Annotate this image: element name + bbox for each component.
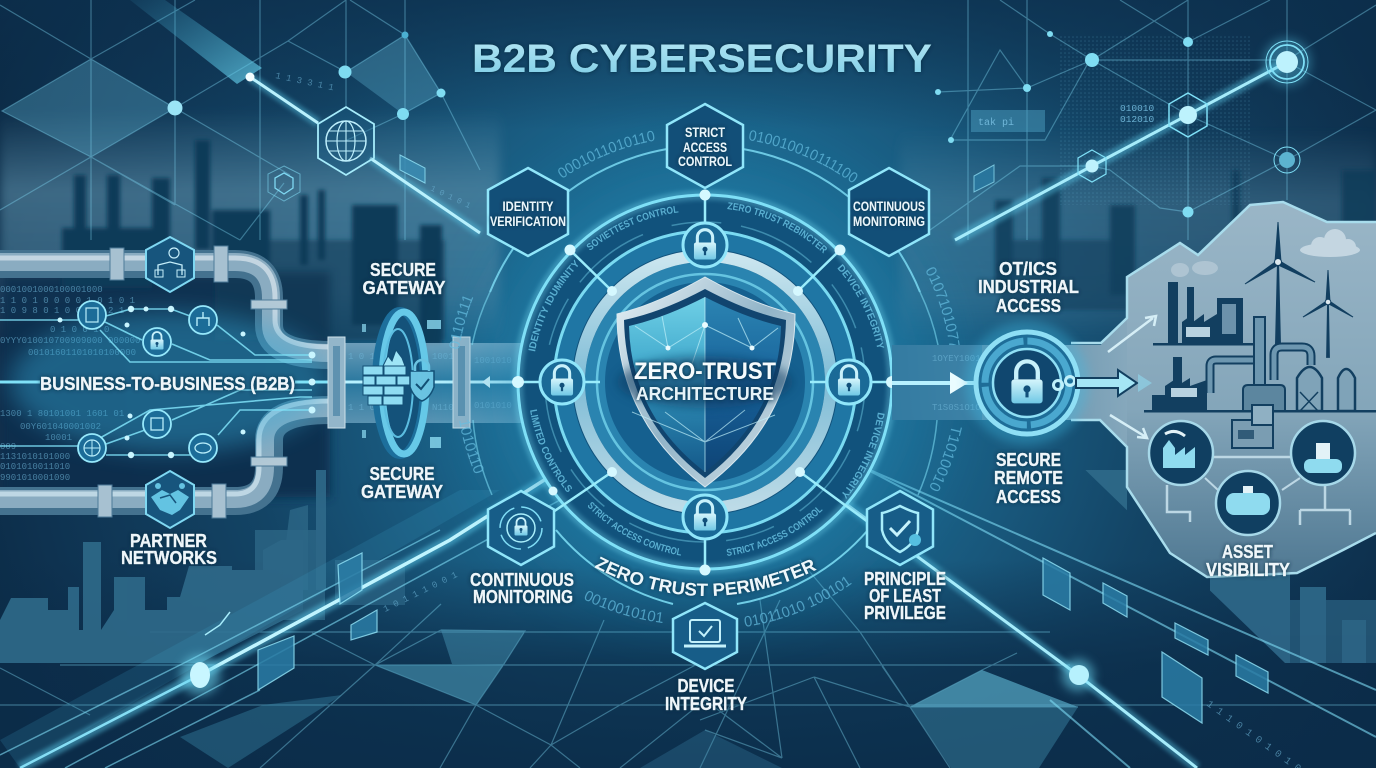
heading: device integrity	[665, 676, 747, 714]
icon: tall stack	[1243, 317, 1285, 411]
panel outline	[1071, 202, 1376, 577]
heading: ot ics industrial access: OT/ICS	[999, 259, 1057, 279]
gateway ring	[376, 311, 426, 455]
shield facets	[632, 297, 778, 472]
beam: upper right with nodes	[935, 31, 1311, 240]
hexagon icon: least privilege shield	[867, 491, 933, 565]
nodes	[512, 190, 898, 576]
background: upper left facets	[2, 35, 441, 157]
icon: globe hexagon	[318, 107, 374, 175]
title: B2B CYBERSECURITY	[472, 37, 932, 81]
hexagon: identity verification	[488, 168, 568, 256]
heading: continuous monitoring lower	[470, 570, 574, 607]
icon: small hexagon	[268, 166, 300, 201]
heading: continuous monitoring lower: MONITORING	[473, 587, 573, 607]
icon: circuit lock node	[143, 328, 171, 356]
beam: upper right with nodes: 012010	[1120, 114, 1155, 125]
ring text	[528, 202, 885, 556]
panel: binary streams left: 1131010101000	[0, 452, 70, 462]
icon: lock right	[827, 360, 871, 404]
heading: partner networks: PARTNER	[130, 531, 207, 551]
binary arcs: 0010010101	[584, 591, 662, 623]
heading: device integrity: INTEGRITY	[665, 694, 747, 714]
pipe: lower	[0, 401, 330, 518]
icon: circuit flow node	[189, 306, 217, 334]
panel: industrial site	[892, 202, 1376, 577]
beam: upper left with globe	[130, 0, 480, 233]
heading: device integrity: DEVICE	[678, 676, 734, 696]
icon: small wind turbine	[1303, 270, 1353, 357]
panel: binary streams left: 0101010011010	[0, 462, 70, 472]
background: lower right skyline	[1085, 470, 1376, 667]
panel: binary streams left: 10001	[45, 433, 72, 443]
icon: handshake hexagon on lower pipe	[146, 471, 194, 528]
ring text: DEVICE INTEGRITY	[842, 412, 885, 499]
binary arcs: T1010010	[930, 428, 962, 492]
arrow: faint	[1138, 374, 1152, 392]
arrow: to industrial site	[1076, 370, 1137, 396]
heading: secure gateway top	[362, 260, 446, 298]
beam: upper left with globe: 1 1 3 3 1 1	[274, 71, 335, 93]
panel: binary streams left: 0001001000100001000	[0, 285, 103, 295]
binary arcs: 01011010 1001010	[744, 576, 852, 626]
ring text: DEVICE INTEGRITY	[838, 264, 884, 348]
data stream through gateway: 0101010	[474, 401, 512, 411]
icon: tank circle	[1216, 471, 1280, 535]
stream band: 1OYEY1001Y	[932, 354, 987, 364]
beam: upper right with nodes: tak pi	[978, 117, 1014, 129]
icon: factory circle	[1149, 421, 1213, 485]
binary arcs: 1010110	[459, 420, 484, 474]
panel: binary streams left: 00Y601040001002	[20, 422, 101, 432]
hexagon icon: continuous monitoring lower	[488, 491, 554, 565]
heading: principle of least privilege: PRINCIPLE	[864, 569, 946, 589]
background: top darkening	[0, 0, 1376, 130]
spokes	[518, 190, 892, 570]
heading: secure remote access: REMOTE	[994, 468, 1063, 488]
small tag icons	[362, 320, 441, 448]
panel: zero trust rings	[450, 130, 962, 626]
background: upper right dot map	[1060, 35, 1250, 205]
mid band	[563, 240, 847, 524]
inner disc	[585, 262, 825, 502]
hexagon: identity verification: VERIFICATION	[490, 213, 566, 229]
panel: binary streams left	[0, 285, 140, 483]
background: upper left skyline	[62, 140, 445, 345]
beam: lower right	[800, 450, 1376, 768]
heading: secure gateway top: SECURE	[370, 260, 436, 280]
pipe: upper	[0, 246, 330, 355]
ring text: ZERO TRUST REBINCTER	[727, 202, 827, 254]
heading: secure gateway top: GATEWAY	[362, 278, 446, 298]
curved heading: zero trust perimeter: ZERO TRUST PERIMETER	[592, 555, 818, 598]
panel: binary streams left: 009	[0, 442, 16, 452]
inner darker disc	[605, 282, 805, 482]
icon: circuit cloud node	[189, 434, 217, 462]
binary arcs: 0107101077	[926, 267, 960, 345]
beam: lower left	[0, 470, 560, 768]
heading: partner networks	[121, 531, 217, 568]
stream band: T1S0S1O1O1	[932, 403, 986, 413]
heading: asset visibility: VISIBILITY	[1206, 560, 1290, 580]
heading: asset visibility: ASSET	[1222, 542, 1273, 562]
ring text: STRICT ACCESS CONTROL	[726, 507, 823, 556]
hexagon: strict access control: STRICT	[685, 124, 725, 140]
binary arcs	[450, 130, 962, 626]
heading: ot ics industrial access: INDUSTRIAL	[978, 277, 1079, 297]
connectors	[1167, 457, 1350, 525]
background: hazy sky left	[0, 110, 500, 340]
data stream through gateway: 1 0 1 0	[348, 352, 386, 362]
icon: lock top	[683, 223, 727, 267]
data stream through gateway: N1101	[432, 403, 459, 413]
heading: zero-trust architecture	[634, 358, 776, 404]
icon: lower factory	[1144, 357, 1376, 412]
hexagon: continuous monitoring top: MONITORING	[853, 213, 925, 229]
beam: upper left with globe: 1 0 1 0 1	[429, 185, 472, 211]
ring text: LIMITED CONTROLS	[530, 409, 572, 492]
icon: pipes network highlight	[1210, 347, 1311, 393]
heading: principle of least privilege	[864, 569, 946, 623]
heading: secure remote access: SECURE	[996, 450, 1061, 470]
flow nodes	[58, 306, 316, 458]
funnel band	[892, 202, 1376, 577]
panel: binary streams left: 0YYY010010700909000 000000	[0, 336, 140, 346]
hexagon: strict access control: CONTROL	[678, 153, 732, 169]
shield text backing	[617, 356, 793, 408]
ring text: IDENTITY IDUMINITY	[528, 260, 578, 352]
beam: lower left: 1 0 1 1 1 0 0 1	[382, 570, 459, 615]
icon: control building	[1232, 405, 1273, 448]
background: floor darkening	[0, 560, 1376, 768]
firewall bricks	[363, 350, 410, 405]
heading: secure gateway bottom: SECURE	[370, 464, 434, 484]
background: upper right skyline	[995, 170, 1376, 310]
icon: valve circle	[1291, 421, 1355, 485]
pipe band to architecture	[345, 343, 530, 423]
background: hazy sky right	[900, 130, 1376, 340]
heading: secure remote access: ACCESS	[996, 487, 1061, 507]
data stream through gateway: 1 1 0	[348, 403, 375, 413]
icon: upper factory	[1153, 282, 1257, 346]
panel: binary streams left: 9901010001090	[0, 473, 70, 483]
heading: principle of least privilege: PRIVILEGE	[864, 603, 946, 623]
heading: secure gateway bottom: GATEWAY	[361, 482, 443, 502]
icon: central shield	[617, 277, 795, 487]
heading: ot ics industrial access	[978, 259, 1079, 316]
stream band	[892, 345, 987, 420]
data stream through gateway	[345, 352, 530, 413]
background: dark zone behind pipes	[0, 272, 330, 497]
ring text: SOVIETTEST CONTROL	[586, 206, 678, 250]
icon: secure remote access lock	[965, 321, 1089, 445]
background: floor facets	[180, 630, 1078, 768]
panel: binary streams left: 0 1 0 0 1 0	[50, 325, 109, 335]
heading: asset visibility	[1206, 542, 1290, 580]
heading: secure remote access	[994, 450, 1063, 507]
heading: zero-trust architecture: ZERO-TRUST	[634, 358, 776, 385]
disc fill	[518, 195, 892, 569]
hexagon: continuous monitoring top: CONTINUOUS	[853, 198, 925, 214]
icon: circuit document node	[78, 301, 106, 329]
heading: continuous monitoring lower: CONTINUOUS	[470, 570, 574, 590]
icon: lock left	[540, 360, 584, 404]
hexagon: strict access control: ACCESS	[683, 139, 727, 155]
smoke	[1171, 261, 1218, 277]
glow: central	[490, 167, 920, 597]
heading: zero-trust architecture: ARCHITECTURE	[636, 383, 774, 404]
heading: principle of least privilege: OF LEAST	[869, 586, 941, 606]
icon: circuit chip node	[143, 410, 171, 438]
ring text: STRICT ACCESS CONTROL	[588, 502, 681, 556]
heading: secure gateway bottom	[361, 464, 443, 502]
flow lines: b2b streams	[0, 309, 345, 455]
arrows to site	[1108, 316, 1156, 438]
background: lower left skyline	[0, 470, 405, 663]
ring lines	[472, 149, 938, 604]
flange right	[453, 337, 470, 428]
binary arcs: 010010010111100	[749, 130, 858, 182]
shield lock	[410, 360, 434, 401]
data stream through gateway: 1001010	[474, 356, 512, 366]
glow behind b2b circuit	[10, 312, 330, 452]
beam: upper right with nodes: 010010	[1120, 103, 1155, 114]
silver ring	[579, 256, 831, 508]
icon: network hexagon on upper pipe	[146, 237, 194, 292]
heading: ot ics industrial access: ACCESS	[996, 296, 1061, 316]
panel: secure gateway firewall	[328, 311, 470, 455]
icon: storage tanks	[1297, 367, 1355, 411]
heading: partner networks: NETWORKS	[121, 548, 217, 568]
icon: circuit globe node	[78, 434, 106, 462]
icon: pipes network	[1210, 347, 1311, 393]
icon: cloud	[1300, 229, 1360, 257]
panel: binary streams left: 1 0 9 8 0 1 0 0 9 0 2 1	[0, 306, 124, 316]
hexagon: strict access control	[667, 104, 743, 188]
icon: lock bottom	[683, 495, 727, 539]
heading: business-to-business: BUSINESS-TO-BUSINESS (B2B)	[40, 374, 295, 394]
binary arcs: 0110111	[450, 296, 474, 349]
hexagon icon: device integrity laptop	[673, 603, 737, 669]
binary arcs: 0001011010110	[558, 130, 654, 178]
panel: binary streams left: 1300 1 80101001 1601 01	[0, 409, 124, 419]
icon: large wind turbine	[1245, 222, 1315, 345]
data stream through gateway: 1001	[432, 352, 454, 362]
hexagon: continuous monitoring top	[849, 168, 929, 256]
flange left	[328, 337, 345, 428]
panel: binary streams left: 00101601101010100000	[28, 348, 136, 358]
panel: binary streams left: 1 1 0 1 0 0 0 0 1 0 1 0 1	[0, 296, 135, 306]
hexagon: identity verification: IDENTITY	[502, 198, 554, 214]
